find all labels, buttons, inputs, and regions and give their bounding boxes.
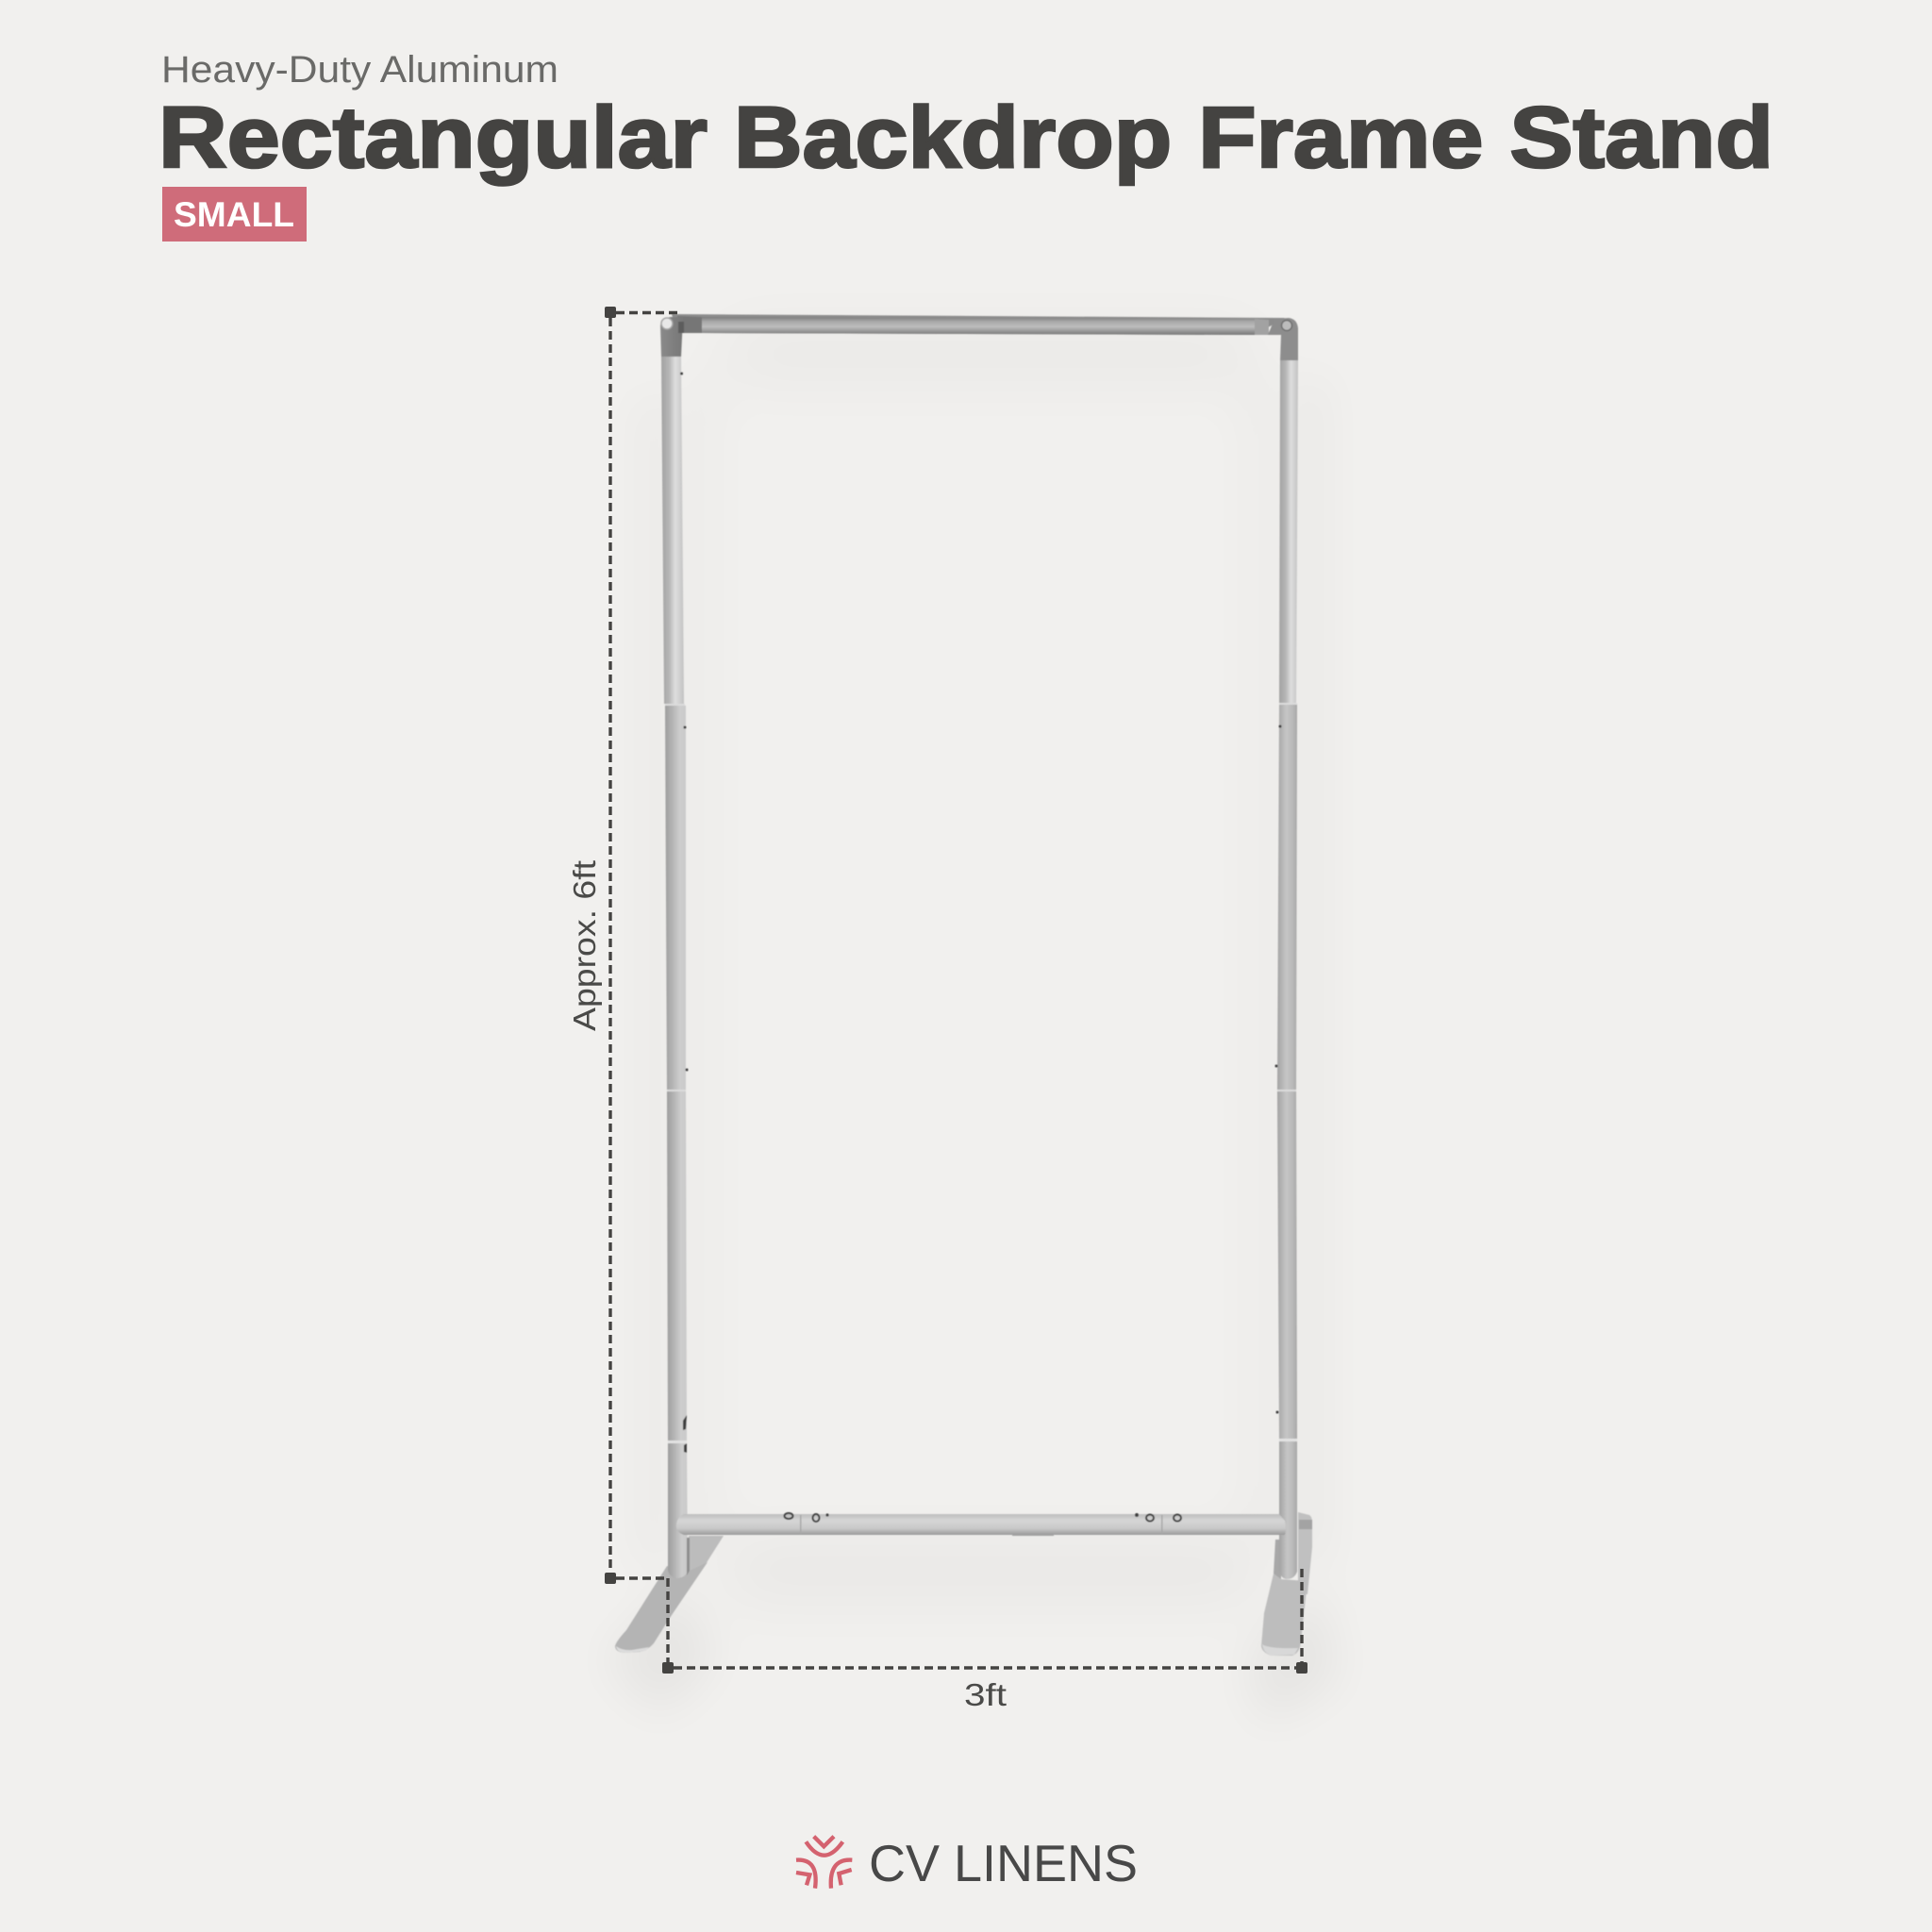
- badge: SMALL: SMALL: [174, 195, 294, 234]
- soft floor and wall shadow: [604, 336, 1340, 1726]
- left foot: [615, 1536, 724, 1653]
- header: title: Rectangular Backdrop Frame Stand: [158, 90, 1774, 186]
- pole and bar fasteners: [680, 372, 1281, 1522]
- label: height: Approx. 6ft: [567, 860, 602, 1031]
- header: subtitle: Heavy-Duty Aluminum: [161, 49, 558, 91]
- product: backdrop frame stand: [615, 314, 1312, 1656]
- right upright pole: [1277, 360, 1298, 1579]
- bottom crossbar: [676, 1514, 1286, 1536]
- top left elbow: [660, 317, 684, 357]
- left upright pole: [661, 357, 690, 1578]
- dimension: width: [662, 1569, 1307, 1674]
- top right elbow: [1268, 318, 1298, 360]
- label: width: 3ft: [964, 1677, 1007, 1712]
- logo: CV Linens: [796, 1834, 1138, 1892]
- badge: SMALL: [162, 187, 307, 242]
- brand name: CV LINENS: [869, 1834, 1138, 1892]
- top crossbar: [672, 314, 1285, 335]
- right foot: [1261, 1512, 1312, 1656]
- icon: logo mark: [796, 1837, 852, 1889]
- dimension: height: [605, 307, 681, 1584]
